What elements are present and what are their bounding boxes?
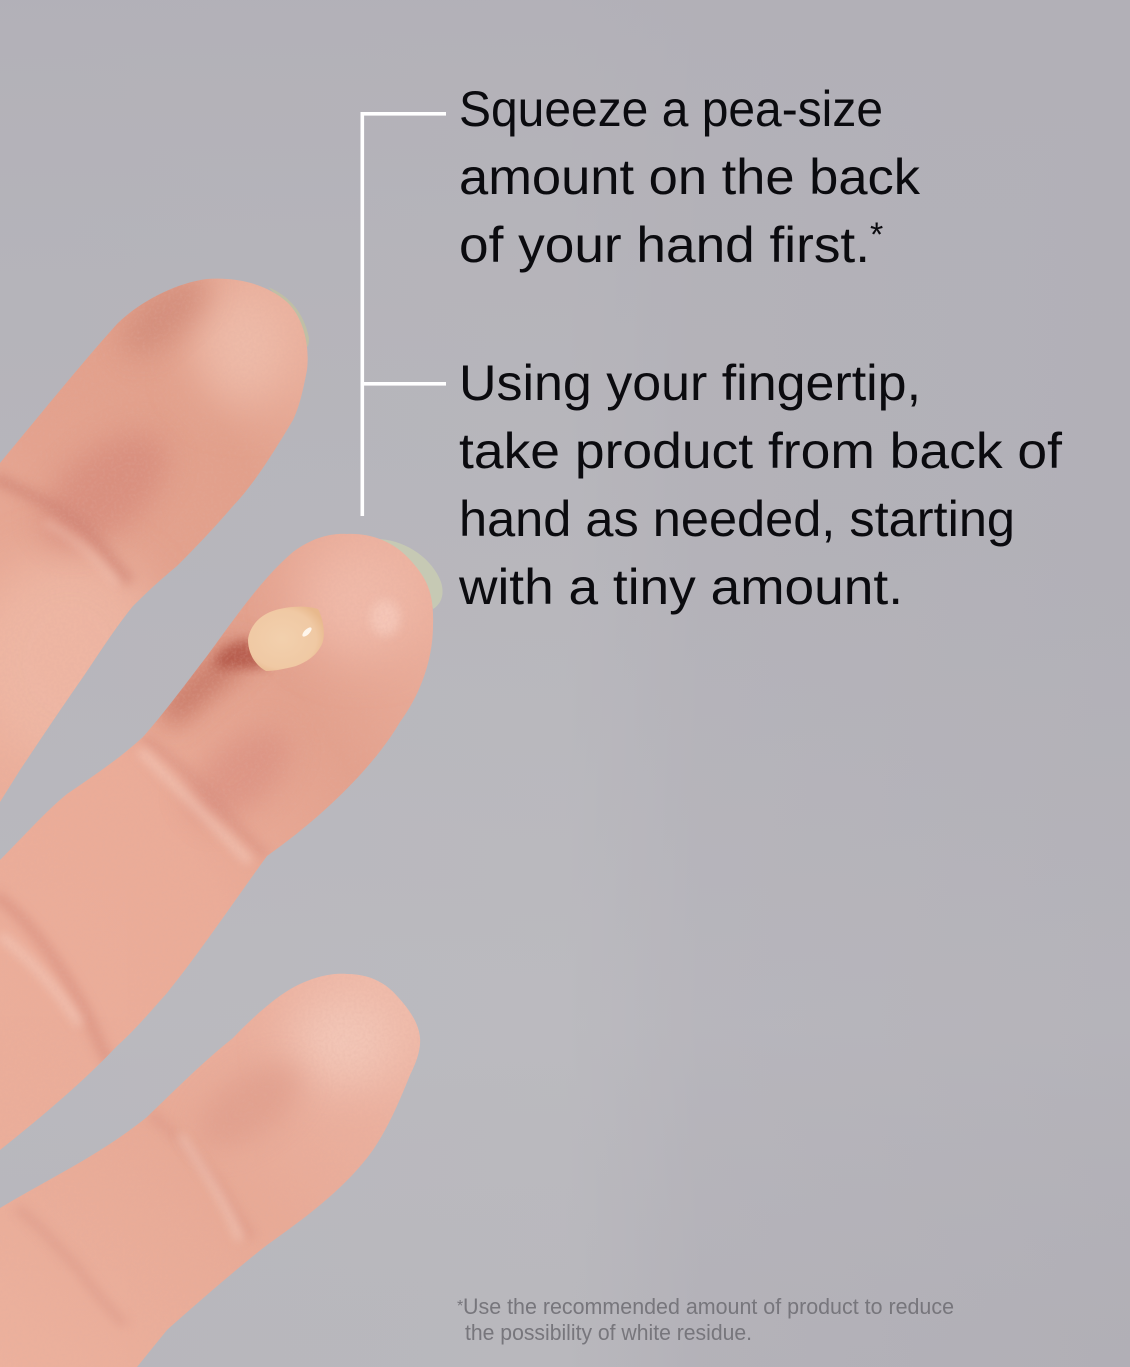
footnote: * bbox=[457, 1298, 463, 1315]
instruction text: step 1: * bbox=[870, 216, 883, 254]
drop highlight bbox=[301, 626, 313, 638]
finger: bottom bbox=[0, 965, 430, 1367]
instruction text: step 2: Using your fingertip, bbox=[459, 355, 921, 411]
nail: middle finger bbox=[378, 539, 443, 609]
instruction text: step 1: Squeeze a pea-size bbox=[459, 81, 883, 137]
instruction text: step 2: take product from back of bbox=[459, 423, 1062, 479]
instruction text: step 1: amount on the back bbox=[459, 149, 921, 205]
footnote bbox=[457, 1294, 954, 1345]
footnote: Use the recommended amount of product to reduce bbox=[463, 1294, 954, 1319]
instruction text: step 2 bbox=[458, 355, 1062, 615]
instruction text: step 1 bbox=[459, 81, 921, 273]
instruction text: step 2: with a tiny amount. bbox=[458, 559, 903, 615]
finger: middle bbox=[0, 525, 445, 1155]
finger: top bbox=[0, 260, 320, 810]
bracket connector bbox=[360, 112, 446, 516]
instruction text: step 2: hand as needed, starting bbox=[459, 491, 1015, 547]
nail: top finger bbox=[268, 287, 309, 347]
product drop bbox=[248, 607, 324, 671]
instruction text: step 1: of your hand first. bbox=[459, 217, 870, 273]
footnote: the possibility of white residue. bbox=[465, 1320, 752, 1345]
hand with three fingers bbox=[0, 260, 445, 1367]
